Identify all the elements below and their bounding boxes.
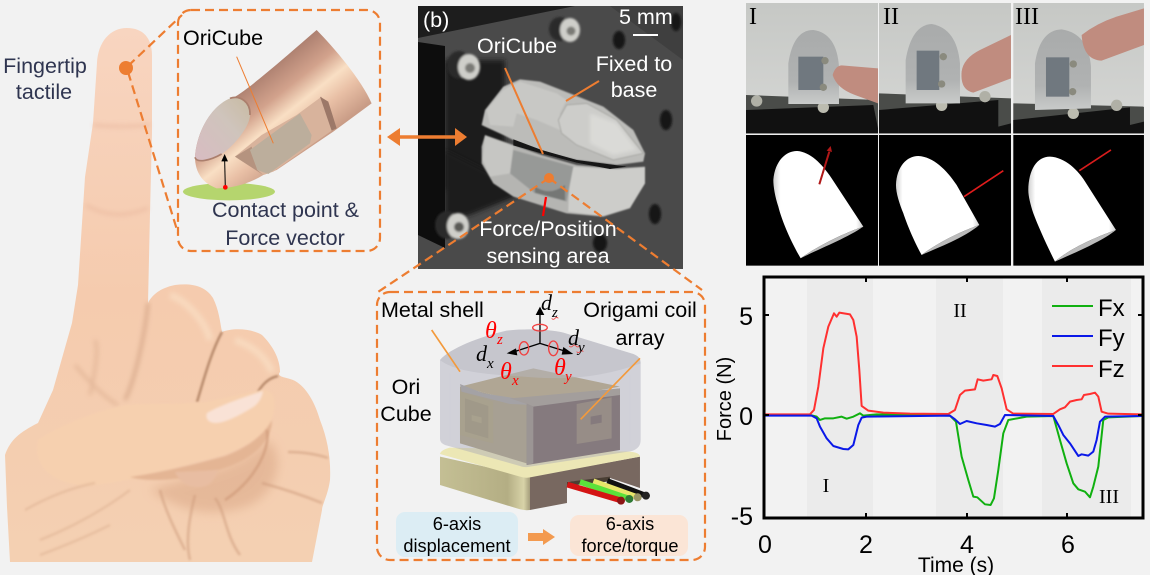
box: 6-axis displacement: displacement (403, 536, 511, 556)
photo: sensor on base (418, 5, 683, 269)
callout: connector dashes and dot (119, 15, 182, 233)
box: 6-axis displacement: 6-axis (433, 514, 481, 534)
chart: force vs time (714, 277, 1143, 575)
bolts (435, 17, 580, 239)
box: 6-axis displacement (396, 512, 518, 557)
rendering I (746, 135, 878, 266)
box: 6-axis force/torque (570, 514, 688, 556)
photos of finger contact (746, 3, 1144, 266)
panel: OriCube device (377, 290, 705, 560)
callout lines (505, 68, 599, 154)
tick labels: 2 (859, 531, 873, 559)
box: 6-axis force/torque: force/torque (581, 536, 679, 556)
base right face (530, 457, 640, 510)
panel: photo and rendering grid (746, 3, 1144, 266)
labels on photo (423, 5, 673, 268)
axis symbols: θ (485, 318, 497, 344)
photo labels: I (749, 4, 757, 30)
axis symbols: y (563, 369, 572, 385)
label: contact point and force vector: Force vector (225, 226, 345, 250)
labels on device: Cube (380, 402, 432, 426)
chart: force vs time: Force (N) (714, 357, 736, 441)
labels on device: array (616, 326, 665, 350)
force vector arrow (221, 154, 228, 190)
phase labels: II (953, 300, 967, 322)
tick labels: 4 (960, 531, 974, 559)
lower shell (482, 135, 645, 217)
photo labels: II (883, 4, 899, 30)
photo III (1013, 3, 1144, 134)
axis symbols: z (496, 332, 503, 348)
rendering II (879, 135, 1011, 266)
labels on device: Metal shell (381, 298, 484, 322)
coils (460, 392, 493, 443)
phase labels (823, 300, 1119, 508)
metal shell (440, 329, 641, 467)
tick labels: 5 (739, 303, 753, 331)
axes (507, 307, 583, 356)
labels on photo: 5 mm (619, 5, 673, 29)
labels on photo: base (611, 78, 657, 102)
holes (593, 13, 681, 252)
data lines (765, 313, 1142, 505)
labels on photo: Force/Position (479, 217, 617, 241)
box: 6-axis force/torque: 6-axis (606, 514, 654, 534)
base left face (440, 457, 530, 510)
axis symbols: d (541, 290, 553, 315)
axes frame (764, 277, 1143, 518)
axis symbols: d (568, 325, 580, 350)
labels on device (380, 298, 697, 426)
label: fingertip tactile: tactile (16, 80, 72, 104)
tick labels (731, 303, 1075, 559)
axis symbols: z (551, 305, 558, 321)
labels on photo: OriCube (477, 34, 557, 58)
label: fingertip tactile (3, 54, 87, 104)
legend: Fy (1098, 325, 1125, 352)
callout: dashed connectors to device panel (378, 173, 702, 292)
tick labels: 0 (739, 403, 753, 431)
shaded bands (807, 278, 1131, 517)
wires (567, 481, 647, 501)
axis symbols: x (486, 356, 494, 372)
label: contact point and force vector: Contact point & (212, 198, 359, 222)
3D device illustration (432, 307, 650, 510)
photo labels (749, 4, 1039, 30)
axis symbols: x (511, 373, 519, 389)
phase labels: I (823, 475, 829, 497)
label: fingertip tactile: Fingertip (3, 54, 87, 78)
legend (1052, 295, 1125, 383)
upper shell (482, 79, 645, 165)
axis symbols (476, 290, 585, 389)
thumbnail (206, 391, 263, 423)
translucent shell (482, 79, 645, 217)
illustration: finger with OriCube (183, 30, 372, 200)
photo I (746, 3, 878, 134)
label: OriCube: OriCube (183, 26, 263, 50)
legend: Fz (1098, 356, 1125, 383)
double arrow (387, 128, 467, 146)
axis symbols: θ (500, 359, 512, 385)
panel: finger illustration (178, 10, 380, 251)
axis symbols: d (476, 341, 488, 366)
photo labels: III (1015, 4, 1039, 30)
labels on photo: Fixed to (596, 52, 672, 76)
label: contact point and force vector (212, 198, 359, 250)
thumb (37, 390, 274, 485)
base top plate (440, 448, 640, 478)
legend: Fx (1098, 295, 1125, 322)
tick labels: 0 (758, 531, 772, 559)
tick labels: 6 (1061, 531, 1075, 559)
hand photo (5, 28, 330, 562)
labels on device: Ori (392, 375, 420, 399)
labels on photo: (b) (423, 8, 449, 32)
labels on device: Origami coil (583, 298, 697, 322)
inner cube (460, 387, 527, 463)
axis symbols: y (576, 340, 585, 356)
phase labels: III (1099, 486, 1119, 508)
tick labels: -5 (731, 503, 753, 531)
axis symbols: θ (554, 355, 566, 381)
labels on photo: sensing area (486, 244, 610, 268)
photo II (879, 3, 1011, 134)
arrow (528, 529, 555, 545)
rendering III (1013, 135, 1144, 266)
